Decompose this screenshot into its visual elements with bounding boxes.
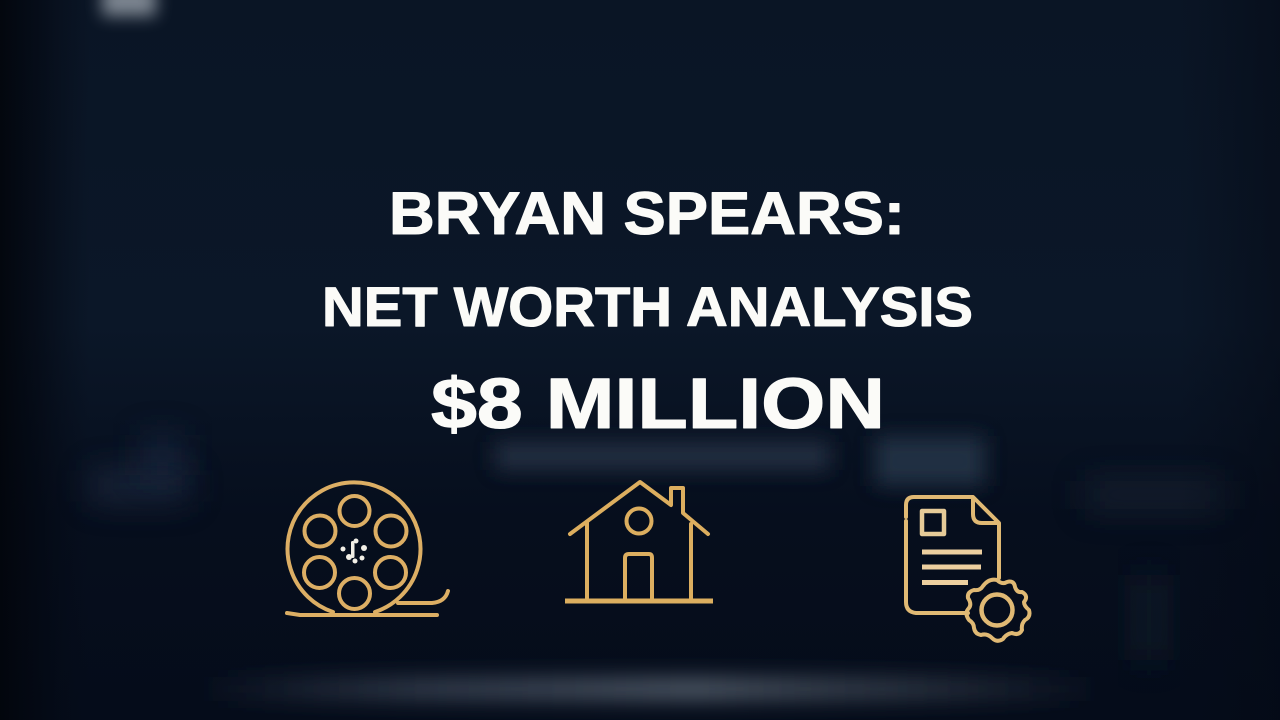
title: Bryan Spears: BRYAN SPEARS: [389, 180, 905, 247]
reel hub [340, 538, 367, 564]
subtitle: Net Worth Analysis: NET WORTH ANALYSIS [322, 275, 973, 338]
icon: film reel [287, 482, 448, 615]
icon: house [565, 482, 713, 601]
gear [966, 580, 1030, 641]
icon: document with gear [906, 497, 1030, 641]
net worth figure: $8 MILLION [431, 365, 885, 444]
